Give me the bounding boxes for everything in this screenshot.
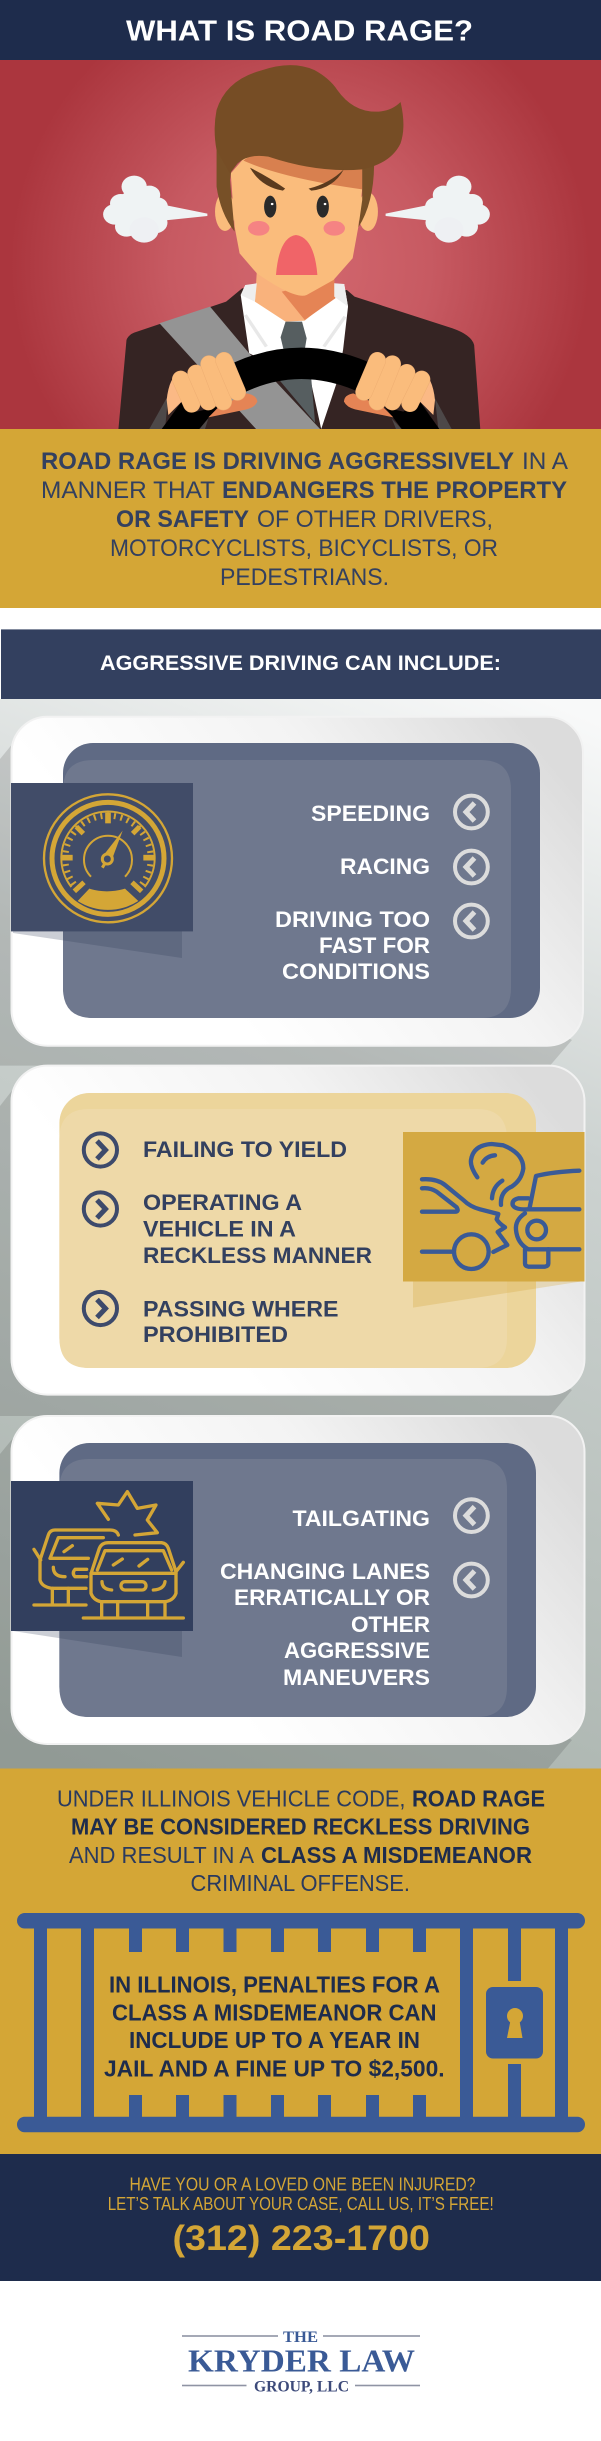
call to action text (108, 2175, 494, 2214)
right fingers (364, 361, 422, 403)
legal text block: MAY BE CONSIDERED RECKLESS DRIVING (71, 1814, 530, 1840)
list item: racing (340, 851, 488, 883)
list item: tailgating: TAILGATING (292, 1506, 430, 1531)
legal text block: AND RESULT IN A (69, 1842, 255, 1868)
legal text block: CRIMINAL OFFENSE. (190, 1870, 410, 1896)
right sideburn (358, 165, 374, 227)
left forearm wheel (162, 402, 218, 429)
list item: reckless manner: VEHICLE IN A (143, 1217, 296, 1242)
steering wheel arc (234, 348, 367, 392)
logo: the kryder law group (182, 2329, 420, 2396)
right forearm wheel (385, 402, 439, 429)
inner panel highlight (59, 1109, 507, 1368)
list item: driving too fast: CONDITIONS (282, 959, 430, 984)
legal text block (57, 1785, 545, 1896)
definition text block: OR SAFETY (116, 506, 249, 533)
section heading band: AGGRESSIVE DRIVING CAN INCLUDE: (100, 651, 501, 675)
panel: speeding and racing card (11, 717, 583, 1046)
panel: illinois law gold section (0, 1768, 601, 2154)
list item: failing to yield (84, 1133, 347, 1167)
face (231, 157, 362, 296)
penalties text block: JAIL AND A FINE UP TO $2,500. (104, 2056, 445, 2082)
collar (241, 283, 348, 307)
panel: tailgating card (11, 1416, 584, 1744)
list item: passing where prohibited: PASSING WHERE (143, 1296, 338, 1322)
legal text block: ROAD RAGE (412, 1785, 545, 1811)
list item: driving too fast: DRIVING TOO (275, 907, 430, 932)
inner panel (59, 1443, 536, 1717)
list item: reckless manner: RECKLESS MANNER (143, 1243, 372, 1268)
definition text block: PEDESTRIANS. (220, 564, 389, 591)
hair (215, 65, 403, 173)
panel: call to action footer (0, 2154, 601, 2281)
icon shadow (13, 931, 182, 958)
eyes (264, 196, 329, 218)
left fingers (181, 361, 237, 404)
icon: right smoke puff (386, 176, 490, 243)
list item: failing to yield: FAILING TO YIELD (143, 1137, 347, 1162)
definition text block: OF OTHER DRIVERS, (257, 506, 493, 533)
icon: left smoke puff (103, 176, 207, 243)
icon: padlock (486, 1987, 543, 2058)
section heading band (1, 629, 601, 699)
list item: changing lanes: MANEUVERS (283, 1665, 430, 1690)
icon shadow (13, 1630, 182, 1657)
list item: driving too fast: FAST FOR (319, 933, 430, 958)
penalties text block: INCLUDE UP TO A YEAR IN (129, 2027, 420, 2053)
definition text block: MOTORCYCLISTS, BICYCLISTS, OR (110, 535, 498, 562)
seat belt straps (149, 395, 452, 429)
neck (255, 272, 334, 322)
gray panel background (0, 699, 601, 1769)
suit jacket (118, 288, 480, 429)
right palm (418, 375, 435, 415)
legal text block: UNDER ILLINOIS VEHICLE CODE, (57, 1785, 406, 1811)
list item: changing lanes: CHANGING LANES (220, 1559, 430, 1584)
list item: reckless manner (84, 1190, 372, 1268)
seat belt (159, 307, 320, 429)
inner panel highlight (59, 1459, 507, 1717)
left ear (215, 192, 235, 231)
list item: reckless manner: OPERATING A (143, 1190, 302, 1215)
logo: the kryder law group: THE (283, 2329, 318, 2346)
shirt creases (245, 315, 345, 347)
neck shadow (282, 278, 335, 320)
phone number: (312) 223-1700 (172, 2219, 430, 2258)
penalties text block (104, 1971, 445, 2082)
logo: the kryder law group: KRYDER LAW (188, 2342, 415, 2378)
left sideburn (217, 150, 235, 232)
mouth (276, 235, 317, 275)
icon: rear-end collision (11, 1481, 193, 1631)
inner panel (59, 1093, 536, 1368)
list item: speeding: SPEEDING (311, 801, 430, 826)
definition text block: MANNER THAT (41, 477, 215, 504)
icon: speedometer (11, 783, 193, 931)
forehead shadow (243, 155, 362, 189)
left palm (167, 375, 183, 415)
logo: the kryder law group: GROUP, LLC (254, 2379, 349, 2396)
header: title: WHAT IS ROAD RAGE? (126, 16, 473, 48)
definition text block: ENDANGERS THE PROPERTY (222, 477, 567, 504)
list item: changing lanes: ERRATICALLY OR (234, 1585, 430, 1610)
list item: tailgating (292, 1499, 488, 1532)
penalties text block: IN ILLINOIS, PENALTIES FOR A (109, 1971, 440, 1997)
tie knot (281, 322, 307, 350)
cheeks (248, 221, 345, 236)
panel: angry driver illustration (0, 60, 601, 429)
inner panel (63, 743, 540, 1018)
eye highlights (271, 203, 326, 205)
shirt (241, 284, 348, 429)
list item: passing where prohibited (84, 1292, 338, 1347)
list item: changing lanes: AGGRESSIVE (284, 1638, 430, 1663)
penalties text block: CLASS A MISDEMEANOR CAN (112, 2000, 436, 2026)
call to action text: LET’S TALK ABOUT YOUR CASE, CALL US, IT’S FREE! (108, 2194, 494, 2214)
icon shadow (413, 1281, 584, 1308)
definition text block (0, 429, 601, 608)
list item: changing lanes: OTHER (351, 1612, 430, 1637)
list item: driving too fast (275, 905, 488, 984)
icon: car crash (403, 1132, 584, 1282)
header: title (0, 0, 601, 60)
call to action text: HAVE YOU OR A LOVED ONE BEEN INJURED? (130, 2175, 476, 2195)
list item: racing: RACING (340, 854, 430, 879)
jail bars (17, 1913, 585, 2132)
lower tie over belt (278, 378, 315, 423)
list item: passing where prohibited: PROHIBITED (143, 1322, 288, 1347)
steering wheel and hands (149, 348, 452, 429)
legal text block: CLASS A MISDEMEANOR (261, 1842, 532, 1868)
right ear (358, 192, 378, 231)
eyebrows (250, 168, 344, 191)
panel: failing to yield card (12, 1066, 584, 1395)
inner panel highlight (63, 760, 511, 1018)
list item: speeding (311, 796, 488, 828)
list item: changing lanes (220, 1559, 488, 1690)
definition text block: ROAD RAGE IS DRIVING AGGRESSIVELY (41, 448, 514, 475)
left thumb (208, 393, 257, 417)
right thumb (344, 393, 393, 417)
definition text block: IN A (522, 448, 568, 475)
